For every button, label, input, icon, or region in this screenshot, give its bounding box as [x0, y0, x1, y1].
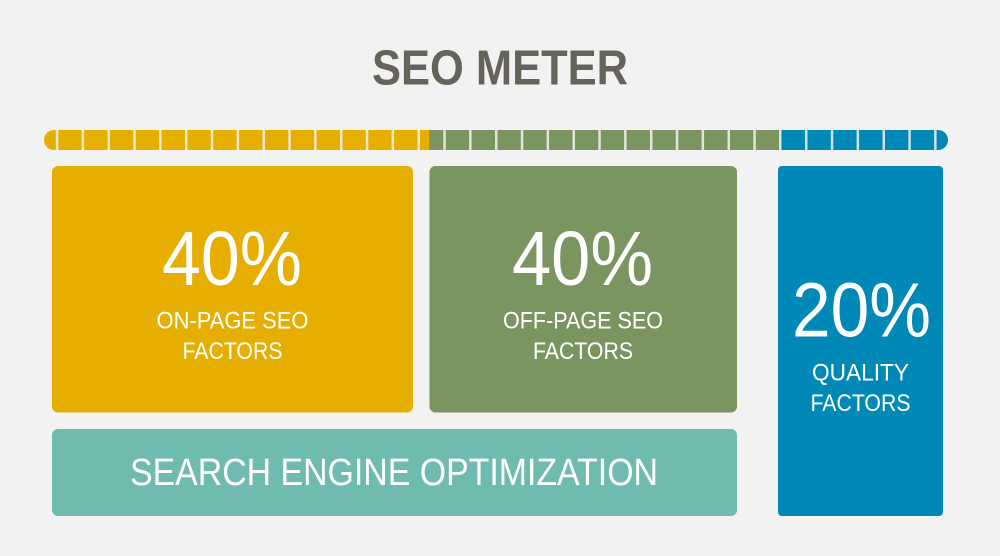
segmented SEO meter bar — [44, 130, 948, 150]
title: SEO METER — [372, 42, 628, 96]
panel: off-page SEO factors — [430, 166, 737, 412]
panel: on-page SEO factors — [52, 166, 413, 412]
quality percentage: 20% — [792, 268, 931, 354]
on-page label: FACTORS — [182, 338, 282, 365]
panel: quality factors — [778, 166, 943, 516]
on-page label — [156, 308, 308, 365]
off-page label: FACTORS — [533, 338, 633, 365]
on-page label: ON-PAGE SEO — [156, 308, 308, 334]
banner text: SEARCH ENGINE OPTIMIZATION — [130, 452, 658, 494]
off-page label — [503, 308, 663, 365]
quality label: QUALITY — [812, 360, 909, 386]
off-page label: OFF-PAGE SEO — [503, 308, 663, 334]
off-page percentage: 40% — [512, 216, 653, 302]
panel: search engine optimization — [52, 429, 737, 516]
quality label: FACTORS — [810, 390, 910, 417]
on-page percentage: 40% — [162, 216, 302, 302]
quality label — [810, 360, 910, 417]
